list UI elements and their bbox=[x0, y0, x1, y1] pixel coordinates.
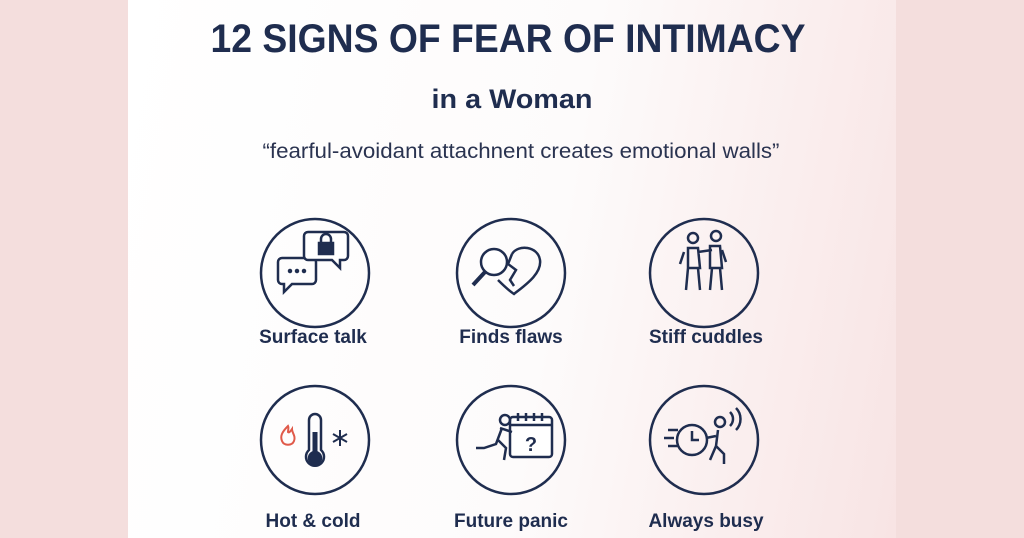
label: hot and cold: Hot & cold bbox=[266, 511, 360, 532]
icon: future panic bbox=[457, 386, 565, 494]
label: finds flaws: Finds flaws bbox=[459, 327, 563, 348]
label: surface talk: Surface talk bbox=[259, 327, 367, 348]
icon: surface talk bbox=[261, 219, 369, 327]
icon: finds flaws bbox=[457, 219, 565, 327]
quote: “fearful-avoidant attachnent creates emotional walls” bbox=[262, 140, 780, 163]
panel: white card bbox=[128, 0, 896, 538]
label: stiff cuddles: Stiff cuddles bbox=[649, 327, 763, 348]
subtitle: in a Woman bbox=[432, 84, 592, 114]
title: 12 SIGNS OF FEAR OF INTIMACY bbox=[210, 17, 806, 61]
icon: hot and cold bbox=[261, 386, 369, 494]
icon: stiff cuddles bbox=[650, 219, 758, 327]
label: future panic: Future panic bbox=[454, 511, 568, 532]
label: always busy: Always busy bbox=[648, 511, 764, 532]
icon: future panic: ? bbox=[525, 434, 537, 456]
icon: always busy bbox=[650, 386, 758, 494]
